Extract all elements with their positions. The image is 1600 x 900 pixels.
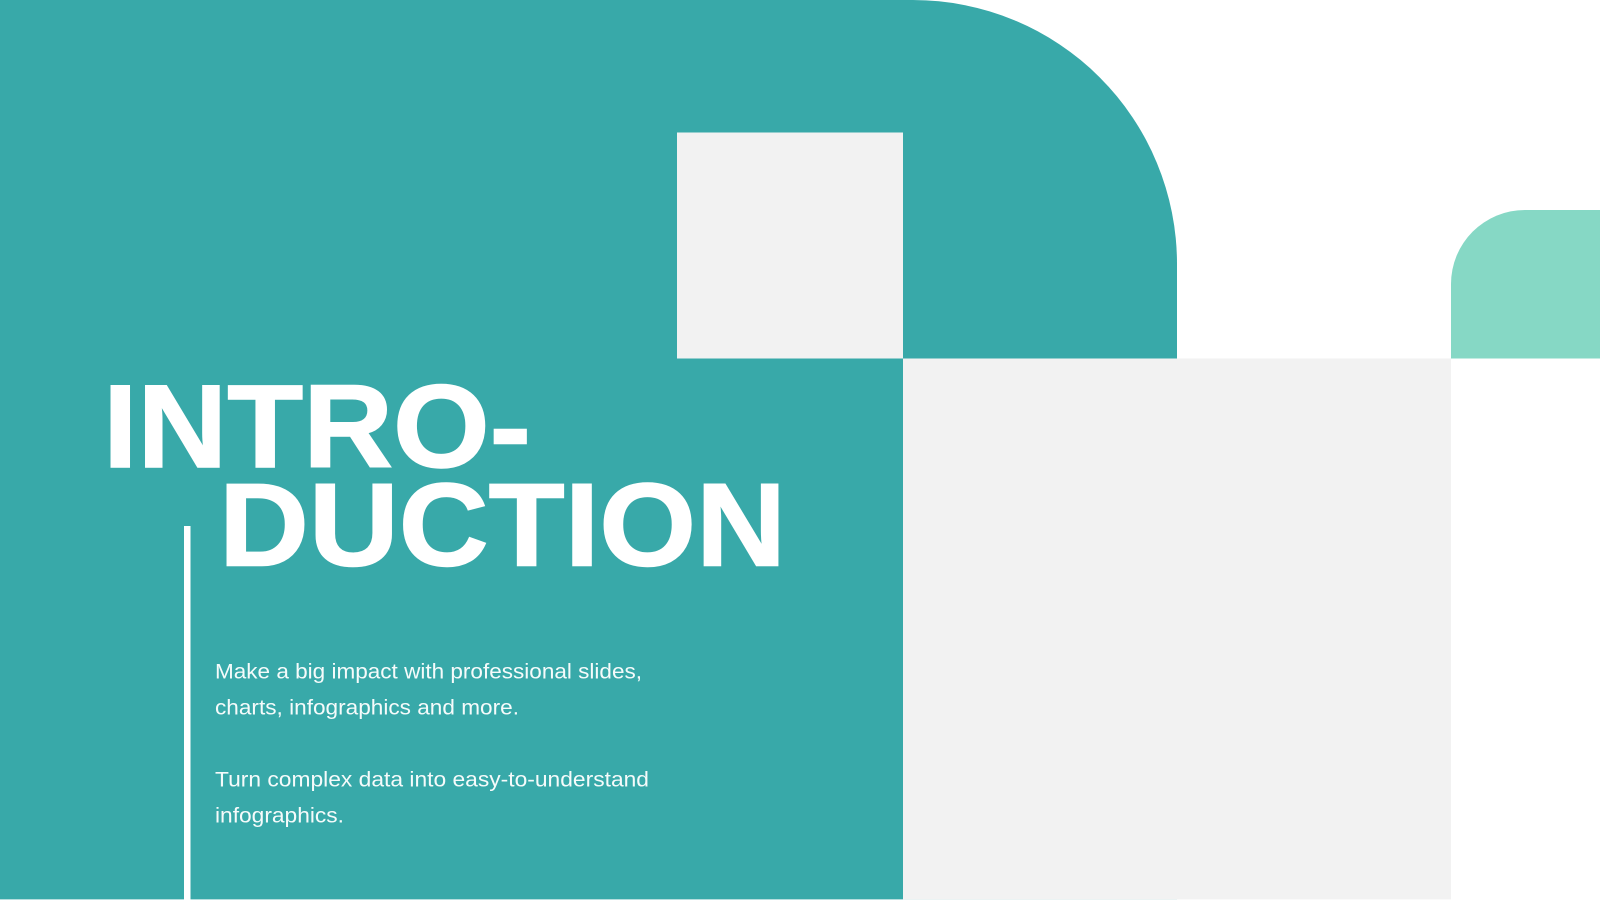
body text: Turn complex data into easy-to-understand	[215, 768, 649, 792]
title: INTRO-	[103, 361, 531, 493]
panel: large light gray rectangle	[903, 358, 1451, 899]
body text	[215, 660, 649, 828]
title	[103, 361, 786, 592]
body text: infographics.	[215, 804, 344, 828]
title: DUCTION	[219, 460, 786, 592]
body text: Make a big impact with professional slides,	[215, 660, 642, 684]
body text: charts, infographics and more.	[215, 696, 519, 719]
panel: large teal rounded background	[0, 0, 1177, 899]
vertical accent line	[184, 526, 190, 900]
panel: mint rounded accent	[1451, 210, 1600, 358]
panel: small light gray square	[677, 132, 903, 358]
